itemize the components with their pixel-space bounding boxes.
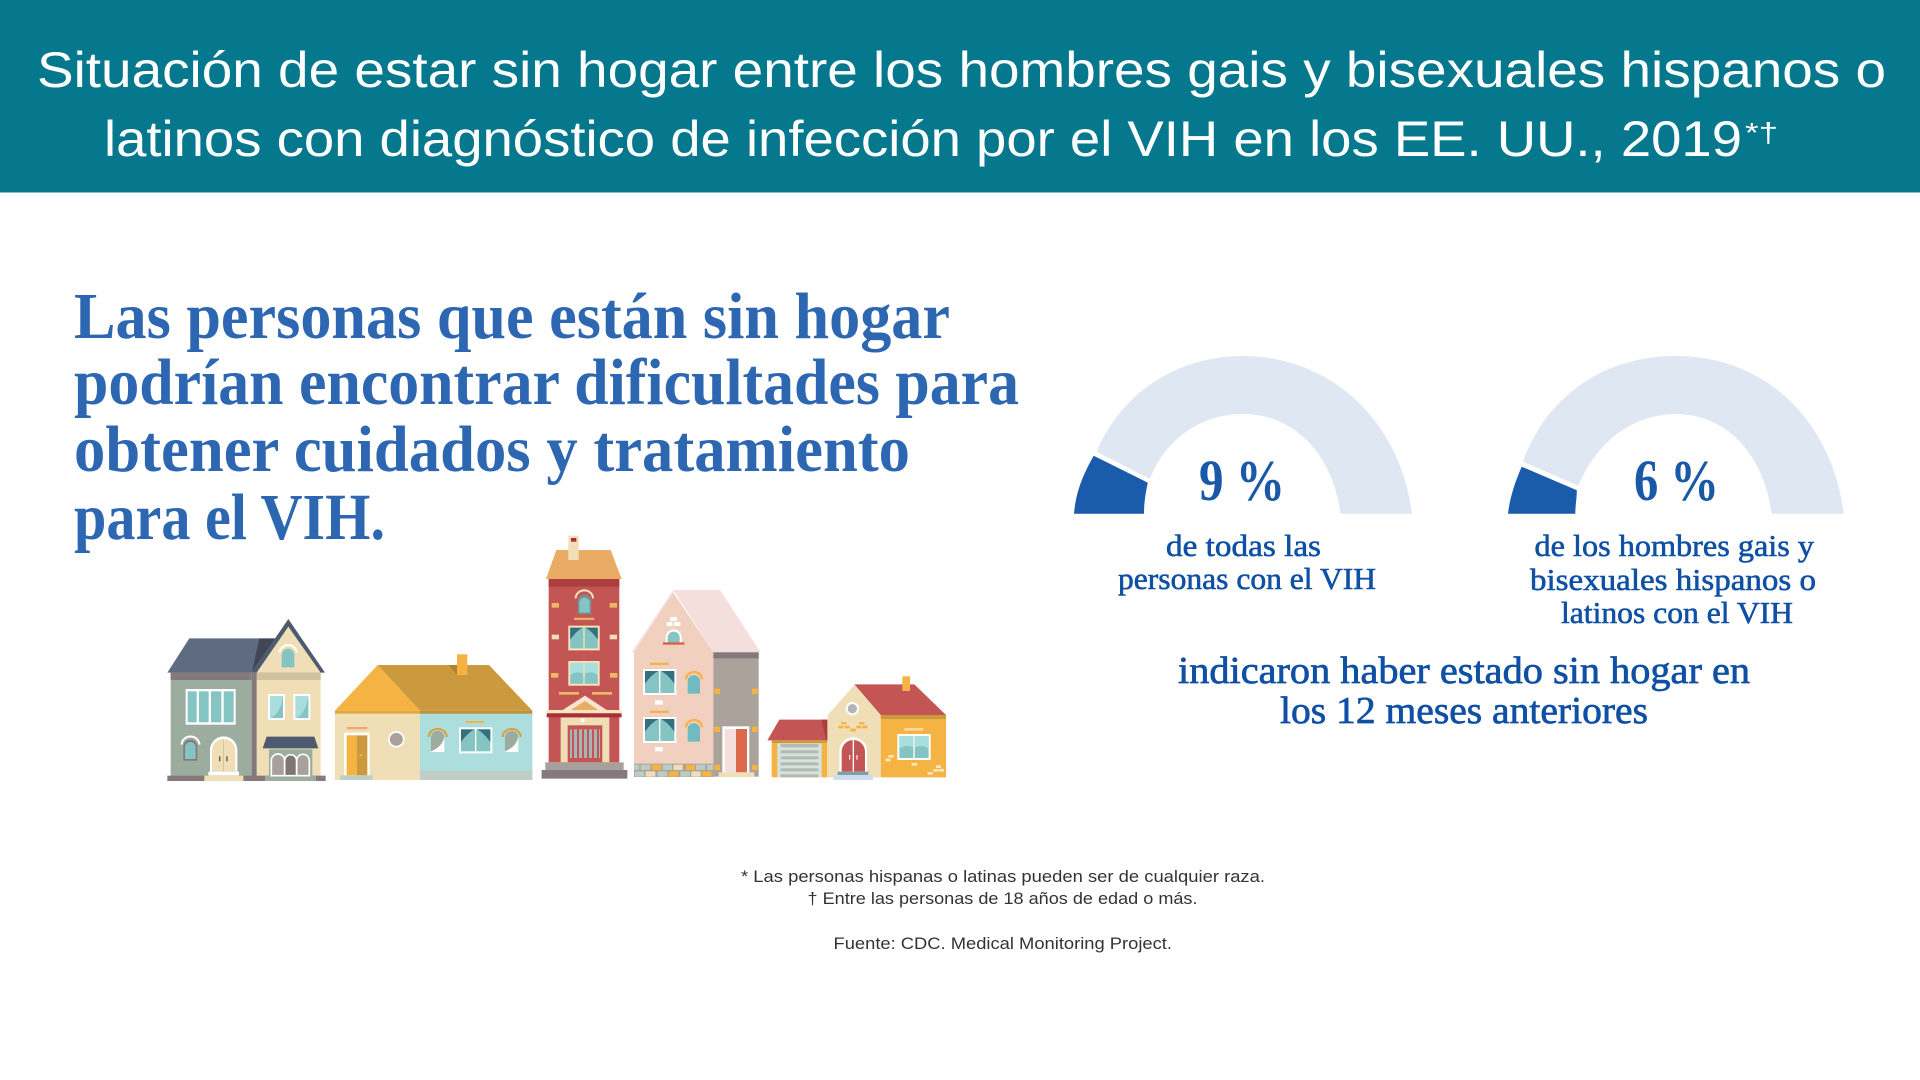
gauge track [1523,356,1844,514]
house 1: grey and cream two-storey [167,619,326,781]
title banner [0,0,1920,192]
house 4: pink three-storey with grey annex [632,590,761,777]
heading: para el VIH. [74,481,385,554]
gauge: 9 % of all people with HIV [1074,356,1412,596]
gauge value [1074,456,1148,514]
house 3: tall red townhouse [542,536,627,779]
heading: obtener cuidados y tratamiento [74,413,910,486]
footnotes and source: † Entre las personas de 18 años de edad o más. [808,889,1198,908]
shared caption [1178,650,1750,732]
title line 1: Situación de estar sin hogar entre los hombres gais y bisexuales hispanos o [37,42,1886,98]
illustration: row of houses [167,536,946,781]
label: personas con el VIH [1118,561,1376,596]
gauge: 6 % of Hispanic/Latino gay and bisexual men with HIV [1508,356,1844,630]
label: bisexuales hispanos o [1530,562,1816,597]
shared caption: indicaron haber estado sin hogar en [1178,650,1750,692]
title line 2: latinos con diagnóstico de infección por el VIH en los EE. UU., 2019 [104,111,1742,167]
gauge track [1097,356,1412,514]
title footnote marks: *† [1745,117,1778,148]
house 2: wide yellow-roof bungalow [335,654,532,780]
value 6 %: 6 % [1634,448,1719,513]
label: de todas las [1166,528,1321,563]
label: latinos con el VIH [1561,595,1793,630]
gauge value [1508,467,1577,514]
footnotes and source: * Las personas hispanas o latinas pueden ser de cualquier raza. [741,867,1265,886]
label [1118,528,1376,596]
value 9 %: 9 % [1199,448,1285,513]
footnotes and source: Fuente: CDC. Medical Monitoring Project. [834,934,1172,953]
label [1530,528,1816,630]
heading: podrían encontrar dificultades para [74,346,1019,419]
shared caption: los 12 meses anteriores [1280,690,1648,732]
footnotes and source [741,867,1265,953]
house 5: small house with garage [767,676,946,780]
heading: Las personas que están sin hogar [74,280,950,353]
label: de los hombres gais y [1534,528,1815,563]
heading [74,280,1019,554]
